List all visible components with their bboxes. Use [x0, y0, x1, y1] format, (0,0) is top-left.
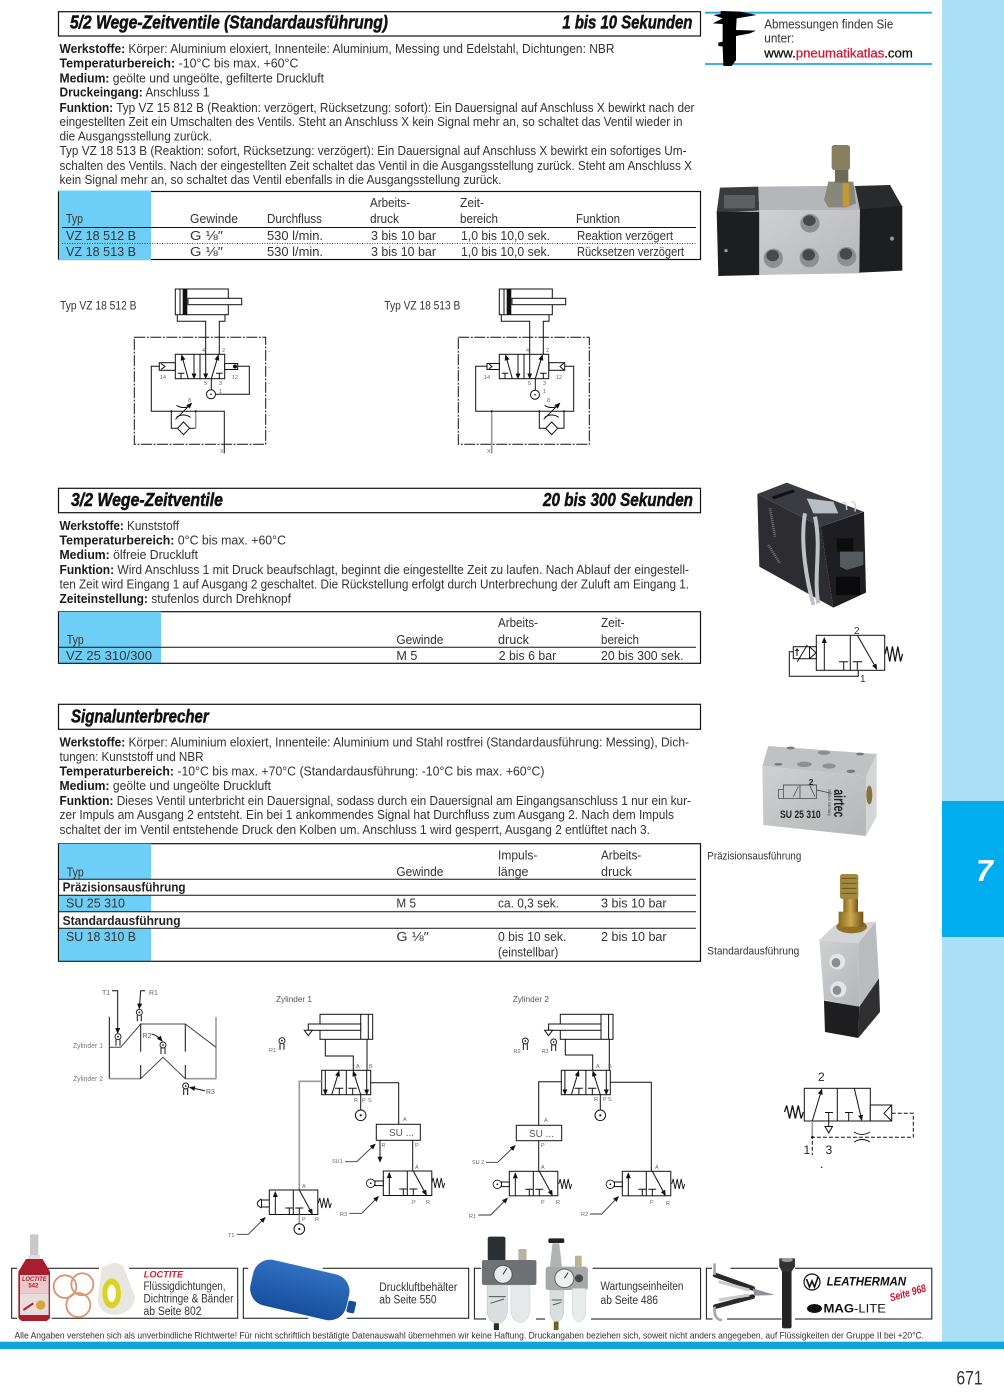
text block: description: zer Impuls am Ausgang 2 entsteht. Ein bei 1 ankommendes Signal hat Durchfluss zum Ausgang 2. Nach dem Impuls — [60, 808, 674, 822]
circuit diagram: Zylinder 1: P — [415, 1143, 419, 1149]
heading: 20 bis 300 Sekunden — [542, 490, 693, 510]
photo: loctite bottle and rings: LOCTITE — [22, 1277, 48, 1283]
ad: Flüssigdichtungen: LOCTITE — [144, 1270, 184, 1280]
chart: timing diagram: Zylinder 1 — [73, 1041, 103, 1050]
circuit diagram: Zylinder 2: B — [608, 1064, 612, 1070]
table: VZ 25: Arbeits- — [498, 616, 538, 630]
table: VZ 18: Funktion — [576, 212, 620, 226]
text block: description: Werkstoffe: Kunststoff — [60, 519, 179, 533]
circuit diagram: VZ 18 513 B: 14 — [484, 375, 490, 381]
circuit diagram: Zylinder 1: R1 — [269, 1048, 276, 1054]
text block: description: Medium: geölte und ungeölte Druckluft — [60, 779, 272, 793]
text block: description: Druckeingang: Anschluss 1 — [60, 86, 210, 100]
text block: description: ten Zeit wird Eingang 1 auf Ausgang 2 geschaltet. Die Rückstellung erfolgt durch Unterbrechung der Zuluft am Eingang 1. — [60, 578, 689, 592]
chapter tab — [942, 801, 1004, 937]
circuit diagram: Zylinder 1: P — [362, 1098, 366, 1104]
table: SU: Präzisionsausführung — [63, 881, 186, 895]
circuit diagram: Zylinder 2: R1 — [469, 1214, 476, 1220]
circuit diagram: VZ 18 513 B: 2 — [546, 348, 549, 354]
box: SU — [376, 1124, 420, 1140]
icon: Leatherman logo — [804, 1274, 820, 1290]
chapter tab: 7 — [976, 853, 995, 888]
circuit diagram: VZ 18 512 B: 3 — [219, 381, 222, 387]
page number: 671 — [956, 1368, 983, 1389]
icon: caliper — [713, 11, 757, 66]
ad: Leatherman and Maglite: LEATHERMAN — [827, 1275, 906, 1289]
circuit diagram: VZ 18 512 B: 12 — [232, 375, 238, 381]
table: VZ 18: Zeit- — [460, 196, 484, 210]
circuit diagram: VZ 18 513 B: 8 — [547, 398, 550, 404]
table: VZ 25 — [58, 612, 700, 664]
box: SU — [516, 1125, 562, 1141]
table: VZ 25: bereich — [601, 633, 639, 647]
ad: Flüssigdichtungen: Flüssigdichtungen, — [144, 1281, 226, 1293]
circuit diagram: Zylinder 2 — [469, 994, 685, 1220]
side band — [942, 0, 1004, 1342]
photo: SU 25 310 block — [762, 746, 877, 836]
circuit diagram: Zylinder 2: P — [541, 1143, 545, 1149]
heading — [58, 12, 700, 36]
table: VZ 18: Typ — [66, 212, 83, 226]
circuit diagram: VZ 18 512 B: 4 — [202, 348, 205, 354]
circuit diagram: Zylinder 1: T1 — [228, 1233, 234, 1239]
table: SU: 2 bis 10 bar — [601, 930, 667, 944]
disclaimer: Alle Angaben verstehen sich als unverbindliche Richtwerte! Für nicht schriftlich bestätigte Datenauswahl übernehmen wir keine Haftung. Druckangaben beziehen sich, soweit nicht anders angegeben, auf Flüssigkeiten der Gruppe II bei +20°C. — [14, 1330, 924, 1341]
heading — [58, 488, 700, 513]
label: Typ VZ 18 513 B: Typ VZ 18 513 B — [384, 300, 461, 312]
circuit diagram: Zylinder 2: SU 2 — [472, 1160, 484, 1166]
chart: timing diagram — [73, 990, 216, 1096]
circuit diagram: Zylinder 2: R — [594, 1097, 598, 1103]
circuit diagram: Zylinder 1: Zylinder 1 — [276, 994, 312, 1004]
ad: Flüssigdichtungen: Dichtringe & Bänder — [144, 1293, 234, 1305]
photo: 5/2 valve — [717, 145, 902, 276]
photo: SU 25 310 block: airtec — [830, 789, 847, 818]
table: VZ 25: 20 bis 300 sek. — [601, 649, 684, 663]
table: VZ 25: M 5 — [396, 649, 417, 663]
table: SU: (einstellbar) — [498, 946, 558, 960]
table: SU: länge — [498, 865, 529, 879]
table: VZ 25: VZ 25 310/300 — [66, 649, 152, 663]
circuit diagram: Zylinder 1: A — [356, 1064, 360, 1070]
chart: timing diagram: T1 — [102, 990, 110, 997]
box: SU: SU ... — [529, 1129, 554, 1140]
ad: Flüssigdichtungen — [12, 1234, 238, 1321]
text block: description: Temperaturbereich: -10°C bis max. +70°C (Standardausführung: -10°C bis max. +60°C) — [60, 765, 544, 779]
table: VZ 18 — [58, 190, 700, 260]
circuit diagram: VZ 18 512 B: 5 — [204, 381, 207, 387]
circuit diagram: Zylinder 1: R — [426, 1200, 430, 1206]
text block: description — [60, 42, 694, 187]
text block: description: Temperaturbereich: -10°C bis max. +60°C — [60, 57, 298, 71]
table: SU: 0 bis 10 sek. — [498, 930, 566, 944]
table: SU: Gewinde — [396, 865, 443, 879]
text block: description: Funktion: Dieses Ventil unterbricht ein Dauersignal, sodass durch ein Dauersignal am Eingangsanschluss 1 nur ein kur- — [60, 794, 691, 808]
circuit diagram: VZ 18 513 B: 1 — [543, 389, 546, 395]
circuit diagram: Zylinder 1: P — [302, 1217, 306, 1223]
text block: description: eingestellten Zeit ein Umschalten des Ventils. Steht an Anschluss X kein Signal mehr an, so schaltet das Ventil wieder in — [60, 115, 683, 129]
circuit diagram: Zylinder 1: R — [354, 1098, 358, 1104]
valve symbol: 3/2 timer — [789, 626, 903, 685]
ad: Wartungseinheiten — [474, 1237, 701, 1330]
table: VZ 18: 3 bis 10 bar — [371, 245, 436, 259]
circuit diagram: Zylinder 1: SU1 — [332, 1159, 343, 1165]
heading: 1 bis 10 Sekunden — [562, 12, 692, 32]
circuit diagram: Zylinder 1: A — [415, 1165, 419, 1171]
circuit diagram: Zylinder 2: R3 — [542, 1049, 549, 1055]
table: VZ 18: 530 l/min. — [267, 229, 323, 243]
circuit diagram: Zylinder 2: R2 — [514, 1049, 521, 1055]
chart: timing diagram: R2 — [142, 1033, 152, 1040]
table: SU: druck — [601, 865, 632, 879]
circuit diagram: Zylinder 2: A — [596, 1064, 600, 1070]
panel: Signalunterbrecher — [58, 704, 700, 962]
ad: Wartungseinheiten: Wartungseinheiten — [600, 1281, 684, 1293]
circuit diagram: Zylinder 2: R — [666, 1201, 670, 1207]
circuit diagram: Zylinder 2: S — [608, 1097, 612, 1103]
circuit diagram: Zylinder 1: R — [315, 1217, 319, 1223]
circuit diagram: Zylinder 1: B — [369, 1064, 373, 1070]
chart: timing diagram: R1 — [149, 990, 158, 997]
ad: Leatherman and Maglite: MAG-LITE — [824, 1301, 886, 1315]
valve symbol: Signalunterbrecher: 2 — [818, 1070, 825, 1084]
text block: description: tungen: Kunststoff und NBR — [60, 750, 204, 764]
circuit diagram: VZ 18 513 B: 12 — [556, 375, 562, 381]
text block: description: Werkstoffe: Körper: Aluminium eloxiert, Innenteile: Aluminium und Stahl rostfrei (Standardausführung: Messing), Dich- — [60, 736, 689, 750]
text block: description: schalten des Ventils. Nach der eingestellten Zeit schaltet das Ventil in die Ausgangsstellung zurück. Steht am Anschluss X — [60, 159, 693, 173]
circuit diagram: Zylinder 2: A — [655, 1165, 659, 1171]
ad: Leatherman and Maglite — [706, 1258, 932, 1328]
table: VZ 25: Zeit- — [601, 616, 624, 630]
ad: Druckluftbehälter — [243, 1256, 469, 1324]
chart: timing diagram: Zylinder 2 — [73, 1074, 103, 1083]
circuit diagram: VZ 18 513 B: 3 — [543, 381, 546, 387]
table: VZ 18: bereich — [460, 212, 498, 226]
circuit diagram: Zylinder 1: A — [403, 1117, 407, 1123]
ad: Wartungseinheiten: ab Seite 486 — [600, 1295, 658, 1307]
table: VZ 18: 1,0 bis 10,0 sek. — [461, 245, 550, 259]
callout: Abmessungen: www.pneumatikatlas .com — [763, 46, 913, 60]
circuit diagram: VZ 18 512 B: 8 — [188, 398, 191, 404]
table: SU: 3 bis 10 bar — [601, 897, 667, 911]
table: VZ 18: Arbeits- — [370, 196, 410, 210]
circuit diagram: VZ 18 512 B — [134, 289, 266, 455]
table: VZ 18: Reaktion verzögert — [577, 229, 673, 243]
panel: 3/2 Wege-Zeitventile — [58, 488, 700, 664]
circuit diagram: Zylinder 1 — [228, 994, 445, 1239]
circuit diagram: Zylinder 2: A — [541, 1165, 545, 1171]
text block: description: schaltet der im Ventil entstehende Druck den Kolben um. Anschluss 1 wird gesperrt, Ausgang 2 entlüftet nach 3. — [60, 823, 650, 837]
heading: Signalunterbrecher — [71, 706, 210, 726]
photo: SU 25 310 block: 2 — [809, 777, 814, 787]
circuit diagram: VZ 18 513 B — [458, 289, 589, 455]
table: SU: SU 18 310 B — [66, 930, 136, 944]
ad: Druckluftbehälter: Druckluftbehälter — [379, 1282, 457, 1294]
valve symbol: Signalunterbrecher: 3 — [826, 1143, 832, 1157]
text block: description: kein Signal mehr an, so schaltet das Ventil ebenfalls in die Ausgangsstellung zurück. — [60, 173, 502, 187]
circuit diagram: VZ 18 513 B: X — [487, 449, 491, 455]
photo: loctite bottle and rings: 542 — [28, 1284, 39, 1290]
text block: description: Medium: ölfreie Druckluft — [60, 548, 199, 562]
photo: loctite bottle and rings — [18, 1234, 135, 1321]
chart: timing diagram: R3 — [206, 1089, 215, 1096]
circuit diagram: Zylinder 2: P — [541, 1200, 545, 1206]
heading: 5/2 Wege-Zeitventile (Standardausführung) — [70, 12, 388, 32]
panel: 5/2 Wege-Zeitventile — [58, 12, 700, 260]
table: VZ 18: G ⅛″ — [190, 229, 224, 243]
text block: description: Funktion: Wird Anschluss 1 mit Druck beaufschlagt, beginnt die eingestellte Zeit zu laufen. Nach Ablauf der eingestell- — [60, 563, 689, 577]
table: VZ 18: Gewinde — [190, 212, 238, 226]
table: SU: Typ — [67, 866, 84, 880]
text block: description — [60, 736, 691, 837]
circuit diagram: VZ 18 513 B: 4 — [526, 348, 529, 354]
table: VZ 18: 1,0 bis 10,0 sek. — [461, 229, 550, 243]
valve symbol: 3/2 timer: 1 — [860, 674, 866, 685]
callout: Abmessungen: unter: — [764, 32, 794, 46]
bottom bar — [0, 1342, 1004, 1349]
heading: 3/2 Wege-Zeitventile — [71, 490, 223, 510]
circuit diagram: Zylinder 2: R2 — [581, 1212, 588, 1218]
callout: Abmessungen: Abmessungen finden Sie — [764, 17, 893, 31]
label: Typ VZ 18 512 B: Typ VZ 18 512 B — [60, 300, 137, 312]
valve symbol: Signalunterbrecher: 1 — [804, 1143, 810, 1157]
text block: description: die Ausgangsstellung zurück. — [60, 130, 212, 144]
table: SU — [58, 844, 700, 962]
table: SU: Arbeits- — [601, 848, 641, 862]
text block: description: Werkstoffe: Körper: Aluminium eloxiert, Innenteile: Aluminium, Messing und Edelstahl, Dichtungen: NBR — [60, 42, 614, 56]
ad: Leatherman and Maglite: Seite 968 — [889, 1282, 928, 1304]
table: SU: ca. 0,3 sek. — [498, 897, 559, 911]
label: Präzisionsausführung: Präzisionsausführung — [707, 850, 801, 862]
photo: blue tank — [247, 1256, 357, 1324]
photo: SU 25 310 block: Made in Germany — [827, 789, 832, 817]
table: SU: SU 25 310 — [66, 897, 125, 911]
circuit diagram: VZ 18 512 B: 2 — [222, 348, 225, 354]
table: SU: Impuls- — [498, 848, 537, 862]
text block: description: Typ VZ 18 513 B (Reaktion: sofort, Rücksetzung: verzögert): Ein Dauersignal auf Anschluss X bewirkt ein sofortiges Um- — [60, 144, 686, 158]
photo: black timer valve — [757, 483, 866, 608]
circuit diagram: Zylinder 2: P — [603, 1097, 607, 1103]
callout: Abmessungen — [705, 11, 932, 66]
table: VZ 25: Typ — [67, 633, 84, 647]
photo: multitool and flashlight — [714, 1258, 795, 1328]
photo: SU 18 310 B valve — [819, 874, 880, 1038]
label: Standardausführung: Standardausführung — [707, 945, 799, 957]
circuit diagram: Zylinder 1: R3 — [340, 1212, 347, 1218]
circuit diagram: Zylinder 2: A — [544, 1118, 548, 1124]
circuit diagram: Zylinder 2: R — [556, 1200, 560, 1206]
circuit diagram: VZ 18 513 B: 5 — [528, 381, 531, 387]
circuit diagram: Zylinder 1: P — [412, 1200, 416, 1206]
text block: description — [60, 519, 689, 606]
table: SU: Standardausführung — [63, 914, 181, 928]
valve symbol: Signalunterbrecher — [784, 1070, 913, 1168]
table: VZ 18: G ⅛″ — [190, 245, 224, 259]
table: VZ 18: Rücksetzen verzögert — [577, 245, 684, 259]
text block: description: Zeiteinstellung: stufenlos durch Drehknopf — [60, 592, 292, 606]
table: VZ 18: 530 l/min. — [267, 245, 323, 259]
text block: description: Temperaturbereich: 0°C bis max. +60°C — [60, 534, 286, 548]
table: VZ 18: VZ 18 513 B — [66, 245, 136, 259]
table: SU: M 5 — [396, 897, 416, 911]
circuit diagram: VZ 18 512 B: X — [220, 449, 224, 455]
text block: description: Funktion: Typ VZ 15 812 B (Reaktion: verzögert, Rücksetzung: sofort): Ein Dauersignal auf Anschluss X bewirkt nach der — [60, 101, 694, 115]
circuit diagram: Zylinder 1: S — [368, 1098, 372, 1104]
valve symbol: 3/2 timer: 2 — [854, 626, 860, 637]
table: VZ 25: Gewinde — [396, 633, 443, 647]
box: SU: SU ... — [389, 1128, 414, 1139]
table: VZ 25: druck — [498, 633, 530, 647]
photo: SU 25 310 block: SU 25 310 — [780, 809, 821, 821]
circuit diagram: VZ 18 512 B: 14 — [160, 375, 166, 381]
table: VZ 18: druck — [370, 212, 400, 226]
circuit diagram: Zylinder 1: R — [382, 1143, 386, 1149]
circuit diagram: VZ 18 512 B: 1 — [219, 389, 222, 395]
table: VZ 18: 3 bis 10 bar — [371, 229, 436, 243]
ad: Druckluftbehälter: ab Seite 550 — [379, 1294, 437, 1306]
circuit diagram: Zylinder 2: P — [650, 1200, 654, 1206]
ad: Flüssigdichtungen: ab Seite 802 — [144, 1306, 202, 1318]
circuit diagram: Zylinder 1: A — [302, 1184, 306, 1190]
circuit diagram: Zylinder 2: Zylinder 2 — [513, 994, 549, 1004]
table: VZ 25: 2 bis 6 bar — [499, 649, 556, 663]
table: VZ 18: VZ 18 512 B — [66, 229, 136, 243]
text block: description: Medium: geölte und ungeölte, gefilterte Druckluft — [60, 71, 324, 85]
icon: Maglite logo — [807, 1304, 822, 1313]
heading — [58, 704, 700, 729]
table: VZ 18: Durchfluss — [267, 212, 322, 226]
table: SU: G ⅛″ — [396, 930, 429, 944]
photo: service units — [482, 1237, 588, 1330]
